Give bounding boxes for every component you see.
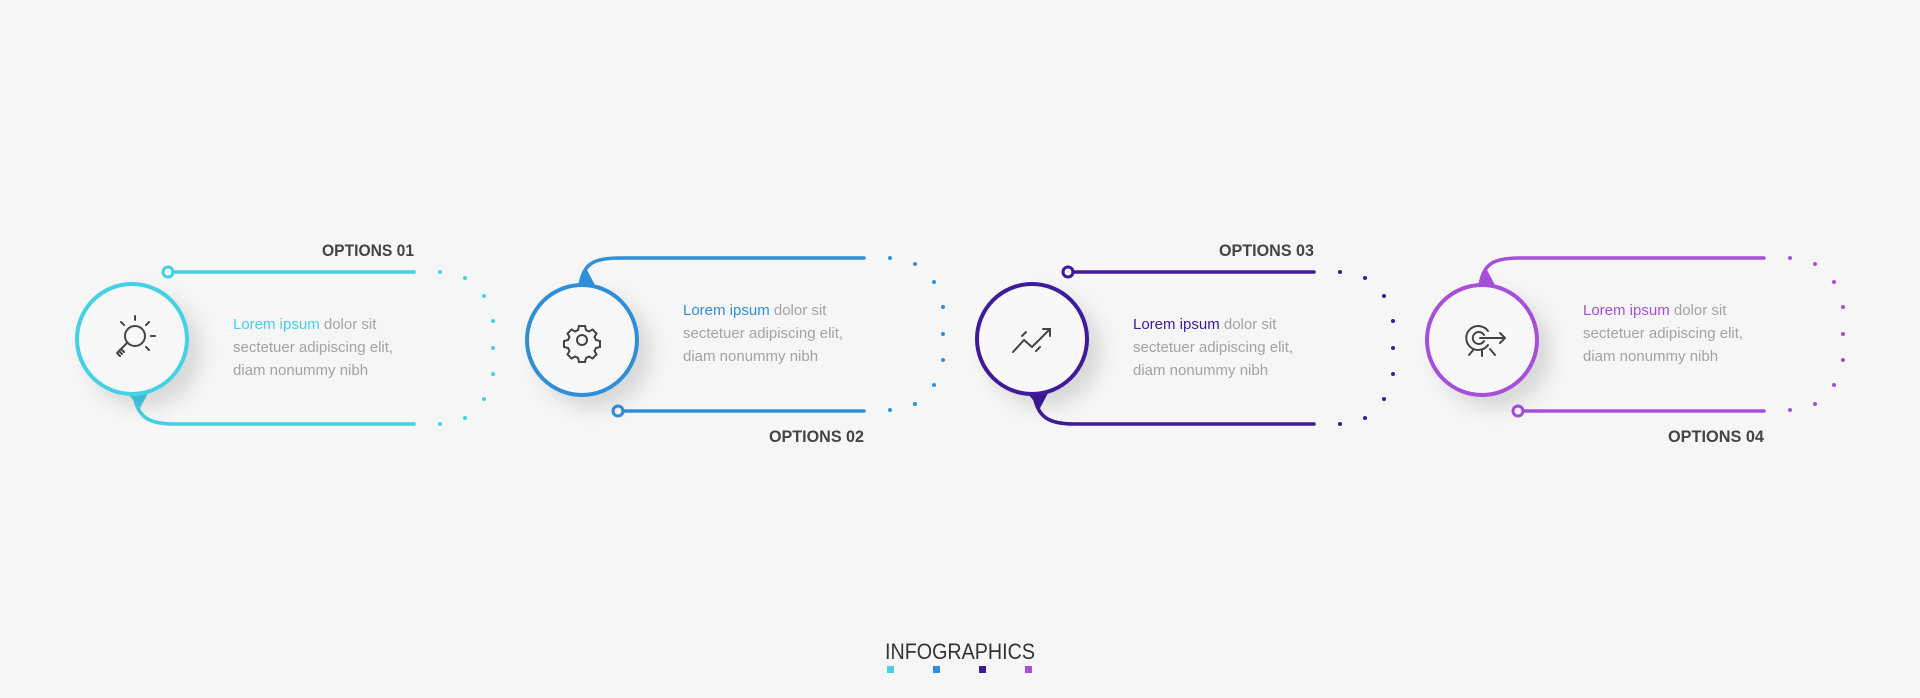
panel: option 3: sectetuer adipiscing elit,	[1133, 339, 1293, 356]
dotted arc	[438, 270, 495, 426]
icon circle: gear	[527, 285, 637, 395]
text block: sectetuer adipiscing elit,	[233, 339, 393, 356]
connector lines	[134, 267, 414, 424]
panel: option 2: sectetuer adipiscing elit,	[683, 325, 843, 342]
heading: options 03: OPTIONS 03	[1219, 241, 1314, 260]
panel: option 4: sectetuer adipiscing elit,	[1583, 325, 1743, 342]
footer title: INFOGRAPHICS	[885, 639, 1035, 664]
panel: option 2: Lorem ipsum dolor sit	[683, 302, 826, 319]
panel: option 1	[77, 241, 495, 426]
panel: option 3	[977, 241, 1395, 426]
panel: option 4: diam nonummy nibh	[1583, 348, 1718, 365]
legend squares	[887, 666, 1032, 673]
icon circle: growth chart	[977, 284, 1087, 394]
icon circle: lightbulb	[77, 284, 187, 394]
panel: option 4: Lorem ipsum dolor sit	[1583, 302, 1726, 319]
panel: option 2: diam nonummy nibh	[683, 348, 818, 365]
heading: options 02: OPTIONS 02	[769, 427, 864, 446]
panel: option 2	[527, 256, 945, 446]
panel: option 3: diam nonummy nibh	[1133, 362, 1268, 379]
panel: option 4	[1427, 256, 1845, 446]
icon circle: target	[1427, 285, 1537, 395]
text block: diam nonummy nibh	[233, 362, 368, 379]
heading: options 01: OPTIONS 01	[322, 241, 414, 260]
panel: option 3: Lorem ipsum dolor sit	[1133, 316, 1276, 333]
heading: options 04: OPTIONS 04	[1668, 427, 1765, 446]
text block: Lorem ipsum dolor sit	[233, 316, 376, 333]
